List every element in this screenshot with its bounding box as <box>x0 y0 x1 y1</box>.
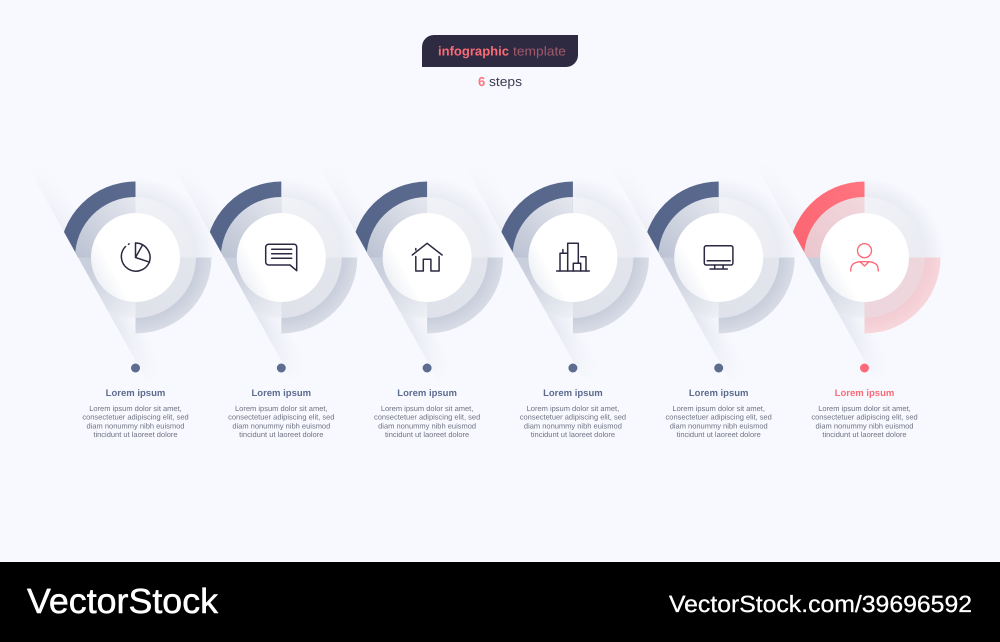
icon: pie chart <box>121 243 150 271</box>
step 5 dot <box>714 364 723 372</box>
step 3 text <box>374 404 480 439</box>
step 5 text: Lorem ipsum dolor sit amet, <box>672 404 765 413</box>
step 3 text: Lorem ipsum dolor sit amet, <box>381 404 473 413</box>
title pill: infographic <box>438 44 509 58</box>
subtitle: steps <box>489 74 523 89</box>
step 6 text: tincidunt ut laoreet dolore <box>822 430 907 439</box>
step 2 <box>171 162 361 439</box>
step 6 text <box>811 404 918 439</box>
step 4 text: consectetuer adipiscing elit, sed <box>520 413 626 422</box>
step 2 text: tincidunt ut laoreet dolore <box>239 430 323 439</box>
step 6 dot <box>860 364 869 372</box>
step 1 ring graphic <box>26 162 216 384</box>
step 3 <box>317 162 507 439</box>
icon: house <box>412 243 442 271</box>
step 1 text <box>82 404 189 439</box>
step 3 text: tincidunt ut laoreet dolore <box>385 430 469 439</box>
step 4 heading: Lorem ipsum <box>543 388 603 399</box>
icon: city buildings <box>557 243 589 271</box>
step 3 text: diam nonummy nibh euismod <box>378 421 476 430</box>
step 4 <box>463 162 653 439</box>
step 4 text <box>520 404 626 439</box>
step 2 text <box>228 404 334 439</box>
title pill: template <box>513 44 566 58</box>
step 1 <box>26 162 216 439</box>
step 1 text: consectetuer adipiscing elit, sed <box>82 413 189 422</box>
subtitle <box>478 74 523 89</box>
step 1 text: diam nonummy nibh euismod <box>87 421 184 430</box>
step 5 text: tincidunt ut laoreet dolore <box>677 430 761 439</box>
step 5 text <box>666 404 772 439</box>
step 2 text: consectetuer adipiscing elit, sed <box>228 413 334 422</box>
step 6 text: Lorem ipsum dolor sit amet, <box>818 404 911 413</box>
icon: monitor <box>704 246 733 269</box>
step 5 ring graphic <box>609 162 799 384</box>
step 3 ring graphic <box>317 162 507 384</box>
step 6 ring graphic <box>754 162 944 384</box>
step 3 dot <box>423 364 432 372</box>
step 3 text: consectetuer adipiscing elit, sed <box>374 413 480 422</box>
step 3 heading: Lorem ipsum <box>397 388 457 399</box>
step 5 heading: Lorem ipsum <box>689 388 749 399</box>
step 6 heading: Lorem ipsum <box>835 388 894 399</box>
step 4 text: diam nonummy nibh euismod <box>524 421 622 430</box>
footer image id: VectorStock.com/39696592 <box>669 591 972 617</box>
step 1 text: Lorem ipsum dolor sit amet, <box>89 404 182 413</box>
step 2 text: Lorem ipsum dolor sit amet, <box>235 404 328 413</box>
step 6 <box>754 162 944 439</box>
title pill <box>422 35 578 67</box>
step 2 dot <box>277 364 286 372</box>
step 4 text: tincidunt ut laoreet dolore <box>531 430 615 439</box>
icon: speech bubble <box>266 244 297 271</box>
step 4 dot <box>568 364 577 372</box>
step 2 ring graphic <box>171 162 361 384</box>
step 4 text: Lorem ipsum dolor sit amet, <box>527 404 619 413</box>
footer bar <box>0 562 1000 642</box>
step 5 text: consectetuer adipiscing elit, sed <box>666 413 772 422</box>
step 2 text: diam nonummy nibh euismod <box>232 421 330 430</box>
step 1 dot <box>131 364 140 372</box>
step 5 <box>609 162 799 439</box>
step 4 ring graphic <box>463 162 653 384</box>
step 6 text: diam nonummy nibh euismod <box>816 421 913 430</box>
step 2 heading: Lorem ipsum <box>251 388 311 399</box>
step 6 text: consectetuer adipiscing elit, sed <box>811 413 918 422</box>
subtitle: 6 <box>478 74 485 89</box>
icon: person <box>851 244 878 271</box>
step 1 text: tincidunt ut laoreet dolore <box>93 430 178 439</box>
step 1 heading: Lorem ipsum <box>106 388 165 399</box>
step 5 text: diam nonummy nibh euismod <box>670 421 768 430</box>
footer logo: VectorStock <box>27 582 219 621</box>
